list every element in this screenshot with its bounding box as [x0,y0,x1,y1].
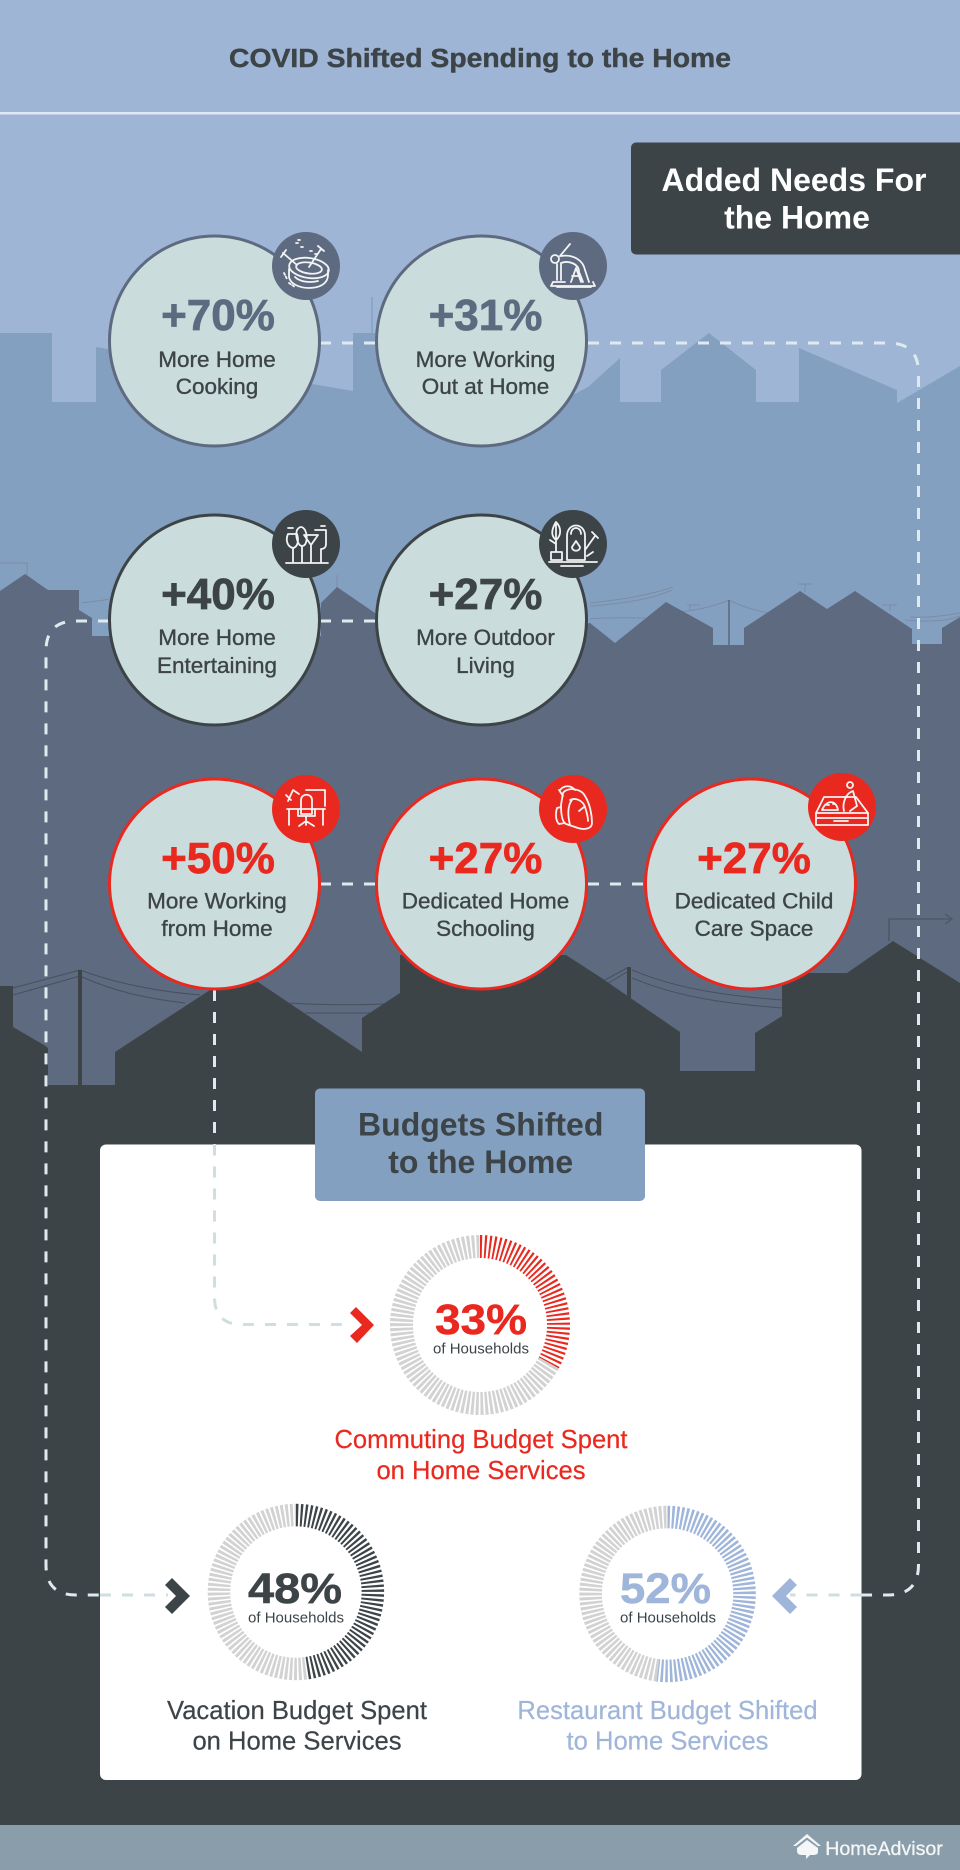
stat: more home entertaining: More Home [158,625,276,650]
stat: dedicated child care space: +27% [697,834,811,883]
icon: wine glasses [272,510,340,578]
arrow: restaurant chevron [772,1578,797,1614]
donut chart: restaurant 52% [591,1517,745,1671]
logo: HomeAdvisor [793,1834,943,1860]
icon: watering can and plant [539,510,607,578]
stat: more outdoor living [376,510,607,725]
label: vacation budget: on Home Services [192,1728,402,1756]
icon: backpack [539,775,607,843]
donut chart: commuting 33%: of Households [433,1340,529,1358]
stat: more outdoor living: Living [456,653,515,678]
brand name: HomeAdvisor [825,1838,943,1860]
stat: more home entertaining: Entertaining [157,653,277,678]
icon: house logo [793,1834,821,1859]
donut chart: vacation 48% [219,1515,373,1669]
arrow: vacation chevron [165,1578,190,1614]
stat: more home cooking: More Home [158,347,276,372]
donut chart: commuting 33% [402,1246,559,1404]
stat: more working from home [110,775,340,989]
donut chart: vacation 48%: 48% [248,1565,342,1613]
arrow: commuting chevron [350,1307,374,1343]
stat: more home cooking: +70% [161,291,275,340]
header divider line [0,112,960,114]
dashed connector: middle row to vacation budget [46,621,375,1595]
stat: dedicated home schooling: Schooling [436,916,535,941]
white budgets panel [100,1144,862,1780]
dashed connector: bottom row to commuting budget [214,884,645,1324]
label: vacation budget: Vacation Budget Spent [167,1697,427,1725]
stat: more working out at home: +31% [429,291,542,340]
donut chart: vacation 48%: of Households [248,1610,344,1626]
icon: cooking pot [272,232,340,300]
stat: more working out at home: More Working [416,347,555,372]
panel heading: budgets shifted [315,1088,645,1201]
panel heading: added needs [631,142,960,254]
stat: more working out at home [376,232,607,446]
stat: more home cooking [110,232,340,446]
stat: dedicated child care space [646,773,876,989]
donut chart: restaurant 52%: of Households [620,1610,716,1626]
stat: dedicated home schooling [376,775,607,989]
heading text: Budgets Shifted [358,1106,603,1142]
stat: more outdoor living: More Outdoor [416,625,555,650]
stat: more working from home: from Home [161,916,273,941]
stat: dedicated child care space: Care Space [695,916,813,941]
icon: child on play mat [808,773,876,841]
skyline: middle houses [0,563,960,1870]
label: restaurant budget: Restaurant Budget Shifted [517,1697,818,1725]
label: restaurant budget: to Home Services [567,1728,768,1756]
stat: more home entertaining: +40% [161,570,275,619]
stat: dedicated home schooling: +27% [429,834,542,883]
label: commuting budget: on Home Services [376,1457,586,1485]
heading text: Added Needs For [662,162,926,198]
stat: dedicated home schooling: Dedicated Home [402,888,569,914]
stat: more working out at home: Out at Home [422,374,549,399]
stat: more working from home: +50% [161,834,275,883]
stat: more outdoor living: +27% [429,570,542,619]
icon: yoga pose [539,232,607,300]
stat: more home entertaining [110,510,340,725]
dashed connector: top row to restaurant budget [320,343,918,1595]
heading text: the Home [724,200,870,236]
donut chart: restaurant 52%: 52% [620,1565,711,1613]
donut chart: commuting 33%: 33% [435,1296,527,1344]
skyline: near houses [0,914,960,1870]
stat: dedicated child care space: Dedicated Child [675,888,833,914]
label: commuting budget: Commuting Budget Spent [334,1426,628,1454]
stat: more working from home: More Working [147,888,287,914]
stat: more home cooking: Cooking [176,374,258,399]
icon: home office desk [272,775,340,843]
footer bar [0,1825,960,1870]
heading text: to the Home [388,1144,573,1180]
title: COVID Shifted Spending to the Home [229,45,731,73]
